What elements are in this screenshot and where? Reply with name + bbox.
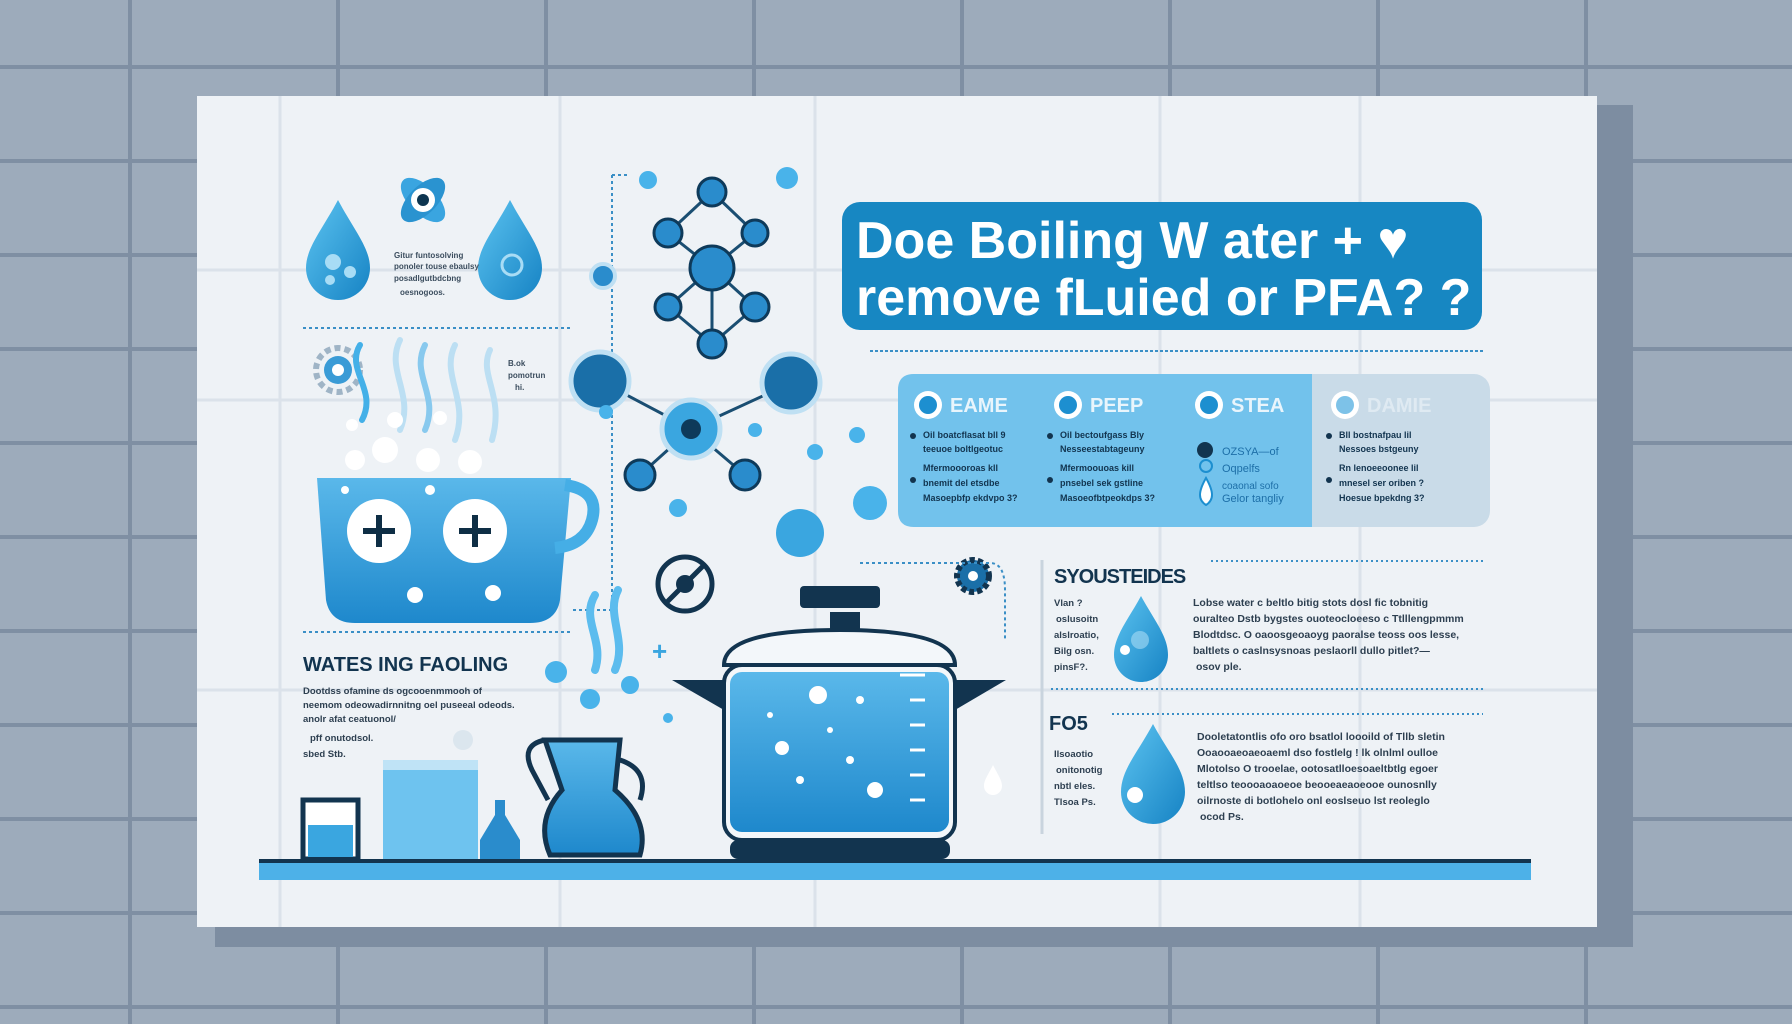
pitcher — [528, 740, 642, 855]
section: syousteides: alslroatio, — [1054, 630, 1099, 641]
section: syousteides: SYOUSTEIDES — [1054, 566, 1186, 588]
shelf — [259, 859, 1531, 880]
panel: columns: DAMIE — [1367, 395, 1431, 417]
panel: columns: teeuoe boltlgeotuc — [923, 444, 1003, 454]
text block left: pff onutodsol. — [310, 733, 373, 744]
panel: columns: Bll bostnafpau lil — [1339, 430, 1412, 440]
text block left: neemom odeowadirnnitng oel puseeal odeods. — [303, 700, 515, 711]
panel: columns: Hoesue bpekdng 3? — [1339, 493, 1425, 503]
panel: columns: Masoeofbtpeokdps 3? — [1060, 493, 1155, 503]
panel: columns: bnemit del etsdbe — [923, 478, 1000, 488]
steam — [356, 340, 496, 440]
panel: columns: Oqpelfs — [1222, 463, 1260, 475]
panel: columns — [898, 374, 1490, 527]
icon: water drops top left — [306, 200, 542, 300]
panel: columns: Oil boatcflasat bll 9 — [923, 430, 1006, 440]
text block left: sbed Stb. — [303, 749, 346, 760]
card shadow — [215, 105, 1633, 947]
panel: columns: coaonal sofo — [1222, 481, 1279, 492]
text block left — [303, 686, 515, 760]
text block top left: ponoler touse ebaulsy — [394, 262, 479, 271]
section: syousteides: baltlets o caslnsysnoas peslaorll dullo pitlet?— — [1193, 645, 1430, 657]
panel: columns: OZSYA—of — [1222, 446, 1280, 458]
section: syousteides: pinsF?. — [1054, 662, 1088, 673]
small droplet — [984, 765, 1002, 795]
section: fo5: onitonotig — [1056, 765, 1103, 776]
panel: columns: Masoepbfp ekdvpo 3? — [923, 493, 1018, 503]
title: Doe Boiling W ater + ♥ — [856, 212, 1408, 270]
panel: columns: Mfermoooroas kll — [923, 463, 998, 473]
icon: cup with plus — [317, 411, 593, 623]
section: fo5: Ilsoaotio — [1054, 749, 1093, 760]
section: fo5 — [1049, 713, 1483, 824]
section: fo5: Tlsoa Ps. — [1054, 797, 1096, 808]
molecule network — [571, 167, 887, 610]
pot — [672, 586, 1006, 859]
section: syousteides — [1054, 566, 1464, 682]
panel: columns: mnesel ser oriben ? — [1339, 478, 1424, 488]
section: fo5: nbtl eles. — [1054, 781, 1095, 792]
panel: columns: Rn lenoeeoonee lil — [1339, 463, 1419, 473]
panel: columns: Nesseestabtageuny — [1060, 444, 1145, 454]
icon: gear small — [957, 560, 989, 592]
icon: no-symbol — [658, 557, 712, 611]
panel: columns: STEA — [1231, 395, 1284, 417]
small note: B.ok — [508, 359, 526, 368]
section: syousteides: Blodtdsc. O oaoosgeoaoyg paoralse teoss oos lesse, — [1193, 629, 1459, 641]
panel: columns: PEEP — [1090, 395, 1143, 417]
panel: columns: Nessoes bstgeuny — [1339, 444, 1419, 454]
panel: columns: Mfermoouoas kill — [1060, 463, 1134, 473]
section: syousteides: oslusoitn — [1056, 614, 1098, 625]
text block top left: posadlgutbdcbng — [394, 274, 461, 283]
section: fo5: Ooaooaeoaeoaeml dso fostlelg ! lk olnlml oulloe — [1197, 747, 1438, 759]
section: fo5: FO5 — [1049, 713, 1088, 735]
section: syousteides: Bilg osn. — [1054, 646, 1094, 657]
panel: columns: Gelor tangliy — [1222, 493, 1284, 505]
small note: pomotrun — [508, 371, 545, 380]
section: fo5: oilrnoste di botlohelo onl eoslseuo lst reoleglo — [1197, 795, 1430, 807]
text: + — [652, 636, 667, 666]
text block left: Dootdss ofamine ds ogcooenmmooh of — [303, 686, 483, 697]
section: fo5: Dooletatontlis ofo oro bsatlol loooild of Tllb sletin — [1197, 731, 1445, 743]
icon: atom — [393, 170, 453, 230]
text block top left — [394, 251, 479, 297]
panel: columns: Oil bectoufgass Bly — [1060, 430, 1144, 440]
text block top left: oesnogoos. — [400, 288, 445, 297]
section: fo5: ocod Ps. — [1200, 811, 1244, 823]
section: fo5: Mlotolso O trooelae, ootosatlloesoaeltbtlg egoer — [1197, 763, 1438, 775]
section: syousteides: Lobse water c beltlo bitig stots dosl fic tobnitig — [1193, 597, 1428, 609]
section: syousteides: osov ple. — [1196, 661, 1242, 673]
text block left: anolr afat ceatuonol/ — [303, 714, 396, 725]
section: fo5: teltlso teoooaoaoeoe beooeaeaoeooe ounosnlly — [1197, 779, 1437, 791]
card — [197, 96, 1597, 927]
small note: hi. — [515, 383, 524, 392]
panel: columns: pnsebel sek gstline — [1060, 478, 1143, 488]
divider lines right lower — [1040, 560, 1044, 834]
icon: gear — [316, 348, 360, 392]
panel: columns: EAME — [950, 395, 1008, 417]
heading: watering: WATES ING FAOLING — [303, 654, 508, 676]
small note — [508, 359, 545, 392]
title: remove fLuied or PFA? ? — [856, 269, 1471, 327]
text block top left: Gitur funtosolving — [394, 251, 463, 260]
steam center — [590, 590, 619, 670]
title — [842, 202, 1482, 330]
bottom glasses — [303, 730, 520, 859]
section: syousteides: ouralteo Dstb bygstes ouoteocloeeso c Ttlllengpmmm — [1193, 613, 1464, 625]
section: syousteides: Vlan ? — [1054, 598, 1083, 609]
